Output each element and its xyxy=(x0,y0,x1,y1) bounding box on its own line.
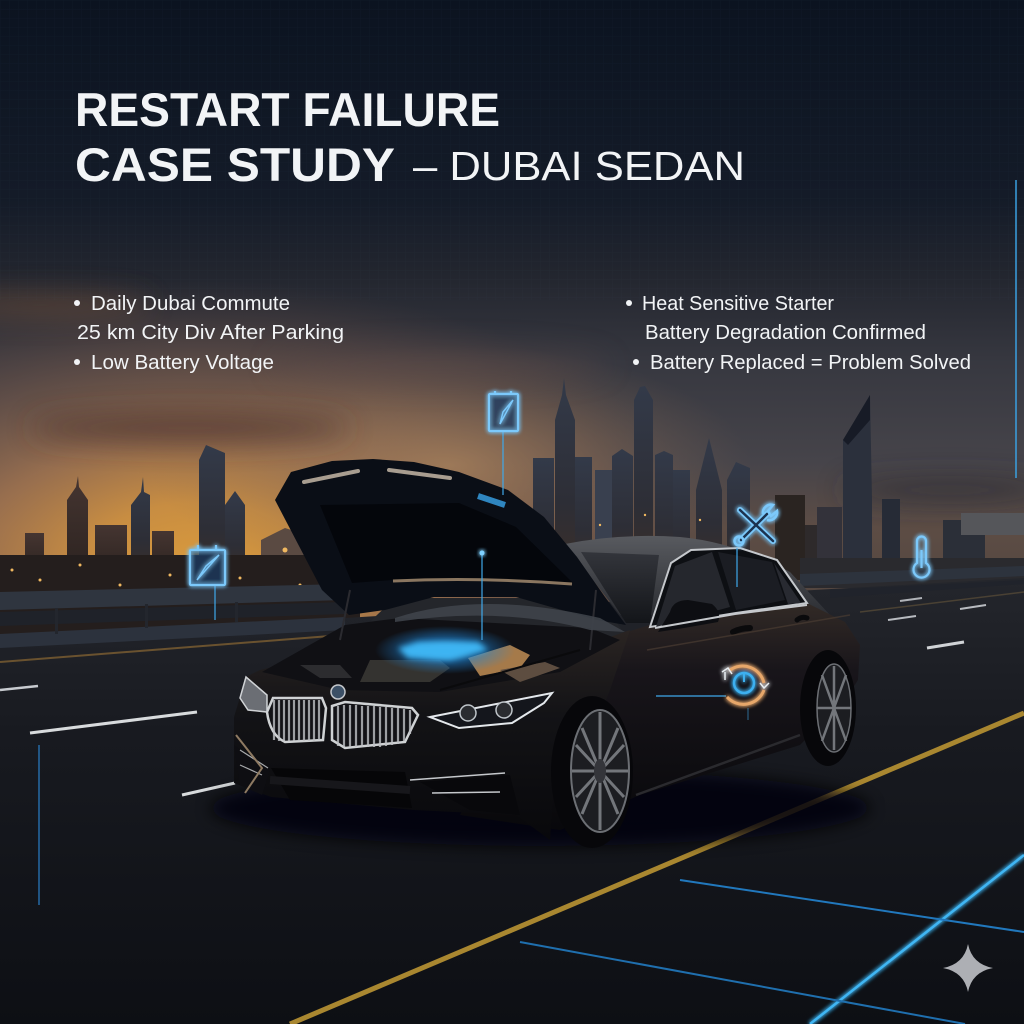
left bullet list: Low Battery Voltage xyxy=(91,352,274,374)
headlights xyxy=(240,677,552,728)
left bullet list xyxy=(74,293,344,374)
title: RESTART FAILURE xyxy=(75,83,500,136)
door handles and sills xyxy=(636,605,850,795)
title xyxy=(75,83,745,191)
icon: battery with needle, top xyxy=(489,391,518,431)
left bullet list: 25 km City Div After Parking xyxy=(77,322,344,344)
lane markings xyxy=(0,598,1024,1024)
BMW kidney grille xyxy=(267,685,418,748)
car shadow xyxy=(210,770,870,846)
front body and bumper xyxy=(234,630,630,840)
icon: thermometer xyxy=(913,536,930,578)
lower bumper xyxy=(234,735,520,815)
engine bay xyxy=(262,618,620,692)
front wheel xyxy=(551,696,633,848)
title: – DUBAI SEDAN xyxy=(413,143,745,189)
car: black sedan xyxy=(234,459,860,848)
right bullet list: Heat Sensitive Starter xyxy=(642,293,834,315)
neon blue road lines xyxy=(39,180,1024,1024)
right bullet list xyxy=(626,293,971,374)
guardrails xyxy=(0,566,1024,648)
right bullet list: Battery Degradation Confirmed xyxy=(645,322,926,344)
rear wheel xyxy=(800,650,856,766)
icon: power restart cycle xyxy=(722,666,769,704)
right bullet list: Battery Replaced = Problem Solved xyxy=(650,352,971,374)
title: CASE STUDY xyxy=(75,138,395,191)
open hood xyxy=(275,459,626,650)
icon: sparkle watermark xyxy=(943,944,993,992)
road xyxy=(0,578,1024,1024)
city skyline xyxy=(0,378,1024,650)
icon: crossed wrench and screwdriver xyxy=(734,505,777,546)
car body side xyxy=(460,603,860,830)
connector dot xyxy=(480,550,484,556)
icon: battery with needle, left xyxy=(190,545,225,585)
left bullet list: Daily Dubai Commute xyxy=(91,293,290,315)
wing mirror xyxy=(658,600,719,632)
side windows xyxy=(650,548,807,627)
car roof and windshield xyxy=(340,536,830,650)
connector lines xyxy=(215,432,748,720)
